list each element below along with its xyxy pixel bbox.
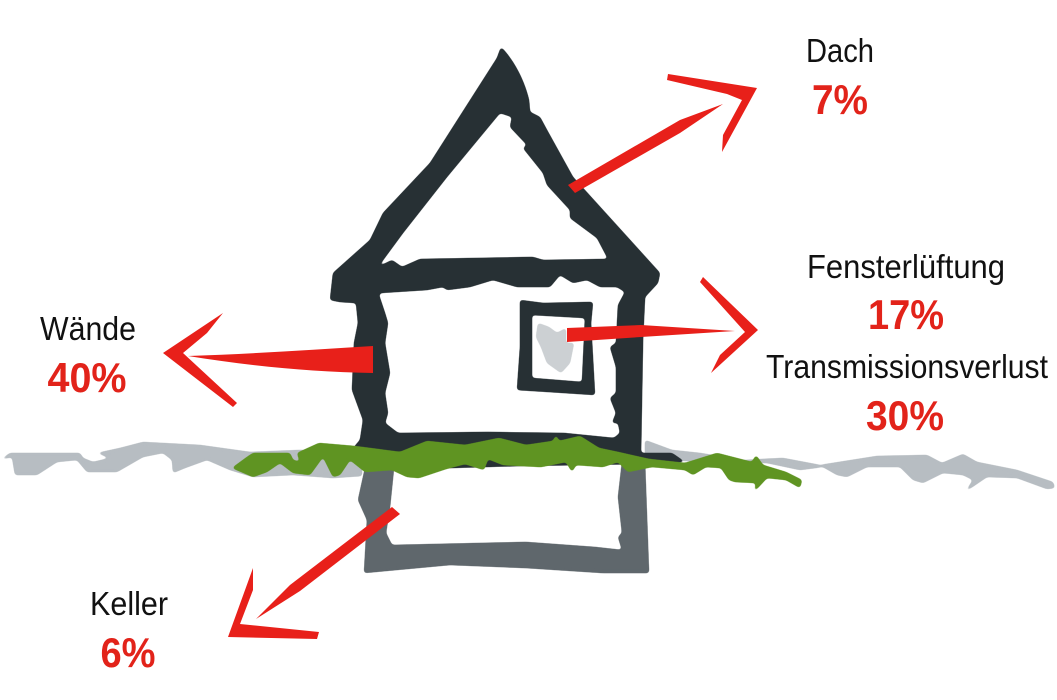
- basement: [358, 462, 649, 573]
- label: Transmissionsverlust: 30%: [866, 392, 944, 439]
- label: Dach: [806, 32, 874, 123]
- label: Keller: Keller: [90, 585, 168, 622]
- house outline: [330, 47, 685, 468]
- label: Wände: Wände: [40, 310, 136, 347]
- arrow: Wände: [163, 313, 373, 407]
- ground line: [0, 440, 1055, 492]
- label: Keller: [90, 585, 168, 676]
- arrow: Fenster: [567, 277, 758, 373]
- label: Fensterlüftung: [807, 248, 1005, 338]
- label: Fensterlüftung: Fensterlüftung: [807, 248, 1005, 285]
- label: Keller: 6%: [100, 629, 156, 676]
- grass: [232, 435, 802, 492]
- label: Dach: Dach: [806, 32, 874, 69]
- label: Wände: [40, 310, 136, 401]
- label: Wände: 40%: [48, 354, 126, 401]
- label: Transmissionsverlust: [766, 348, 1048, 439]
- arrow: Keller: [228, 507, 400, 639]
- label: Dach: 7%: [812, 76, 868, 123]
- label: Fensterlüftung: 17%: [868, 291, 944, 338]
- window pane: [536, 323, 574, 373]
- arrow: Dach: [568, 74, 757, 193]
